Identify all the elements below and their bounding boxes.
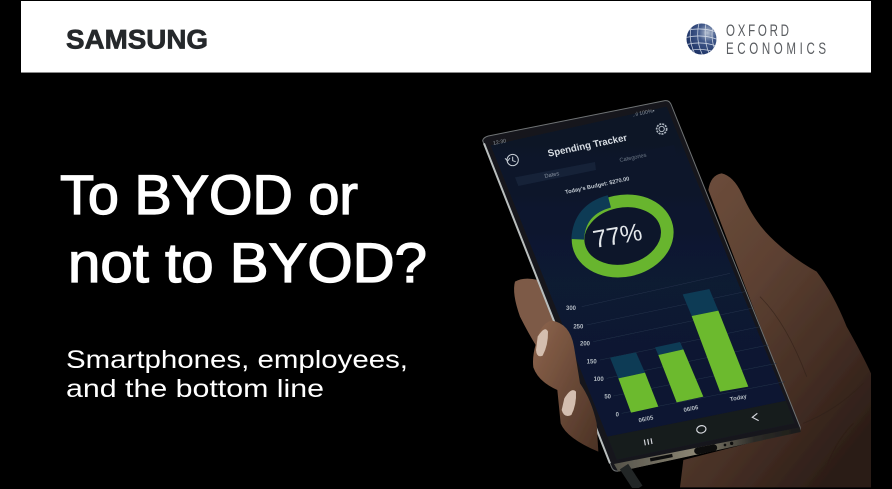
budget label: Today's Budget: $270.00 <box>565 176 630 196</box>
icon: history <box>505 154 518 166</box>
status bar: ..ıl 100%▪ <box>632 108 655 119</box>
title: To BYOD or <box>60 163 358 226</box>
subtitle: Smartphones, employees, <box>66 346 408 374</box>
rear finger <box>514 279 570 347</box>
cable <box>624 467 638 488</box>
Samsung logo: SAMSUNG <box>66 24 208 54</box>
tabs: Dates <box>544 171 560 180</box>
axis labels <box>566 306 620 419</box>
axis labels: 300 <box>566 306 577 312</box>
phone screen <box>491 107 795 460</box>
bar labels: Today <box>730 394 748 403</box>
axis labels: 100 <box>594 377 604 383</box>
Oxford Economics logo <box>686 24 826 54</box>
icon: palm and thumb <box>680 173 871 487</box>
header band <box>21 1 871 73</box>
donut chart <box>571 193 674 279</box>
tabs <box>515 154 646 186</box>
icon: settings gear <box>657 124 667 134</box>
title: not to BYOD? <box>68 231 427 294</box>
phone edge highlight <box>484 143 610 463</box>
axis labels: 250 <box>573 325 584 331</box>
screen heading: Spending Tracker <box>547 133 629 160</box>
phone in hand illustration <box>483 101 871 488</box>
axis labels: 0 <box>616 413 620 419</box>
subtitle: and the bottom line <box>66 375 324 403</box>
tabs: Categories <box>619 153 647 164</box>
status bar <box>493 108 655 147</box>
phone body <box>483 101 800 471</box>
front fingers <box>533 321 598 452</box>
bar labels: 06/05 <box>638 415 655 424</box>
logo wordmark: ECONOMICS <box>726 40 826 59</box>
bar labels: 06/06 <box>683 405 700 414</box>
donut value: 77% <box>591 219 645 254</box>
navigation bar <box>607 401 795 460</box>
subtitle <box>66 346 408 403</box>
axis labels: 150 <box>587 360 597 366</box>
status bar: 12:30 <box>493 138 507 147</box>
logo wordmark <box>726 22 826 59</box>
axis labels: 200 <box>580 341 591 347</box>
title <box>60 163 427 294</box>
icon: globe <box>686 24 716 54</box>
bar chart <box>610 289 748 413</box>
logo wordmark: OXFORD <box>726 22 789 41</box>
axis labels: 50 <box>604 394 612 400</box>
grid lines <box>582 273 785 413</box>
bar labels <box>638 394 748 424</box>
charging port edge <box>614 427 801 472</box>
palm creases <box>760 296 824 423</box>
